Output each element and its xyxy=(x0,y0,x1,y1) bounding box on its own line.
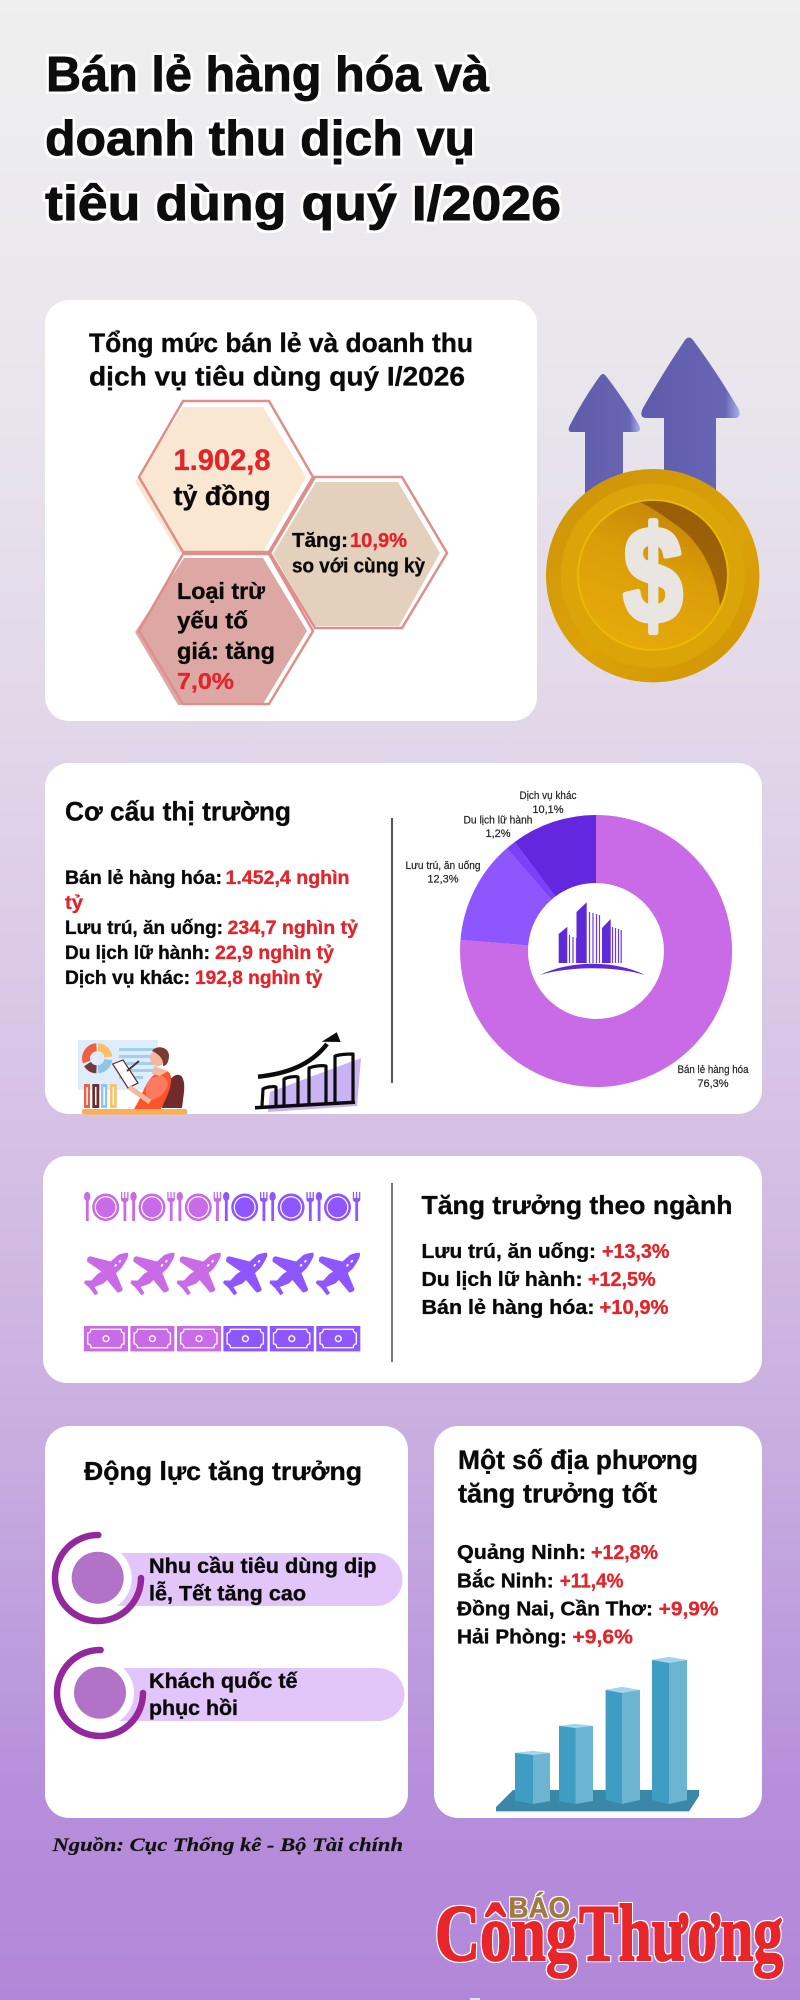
sector growth list: +12,5% xyxy=(588,1269,656,1291)
driver: holiday demand: lễ, Tết tăng cao xyxy=(149,1582,306,1606)
icon row: plates xyxy=(84,1192,360,1221)
panel: growth by sector xyxy=(43,1156,762,1383)
panel: market structure xyxy=(45,763,762,1114)
donut labels: Lưu trú, ăn uống xyxy=(406,860,480,872)
hexagon: excluding price factor: giá: tăng xyxy=(177,638,275,664)
locality growth list: +11,4% xyxy=(560,1570,624,1592)
locality growth list: +9,6% xyxy=(572,1626,633,1648)
donut labels: Du lịch lữ hành xyxy=(464,815,532,827)
hexagon: growth rate: 10,9% xyxy=(350,530,407,552)
panel: leading localities xyxy=(434,1426,762,1818)
market value list: Bán lẻ hàng hóa: xyxy=(65,868,222,889)
donut labels: 1,2% xyxy=(485,828,511,840)
hexagon: growth rate: Tăng: xyxy=(292,530,348,552)
donut labels: 76,3% xyxy=(697,1078,729,1090)
heading xyxy=(458,1445,698,1508)
source note: Nguồn: Cục Thống kê - Bộ Tài chính xyxy=(51,1835,403,1856)
icon: rising arrows and gold coin: $ xyxy=(624,499,682,651)
hexagon: total value: 1.902,8 xyxy=(174,444,270,477)
panel heading: Tổng mức bán lẻ và doanh thu xyxy=(89,328,473,358)
driver: holiday demand: Nhu cầu tiêu dùng dịp xyxy=(149,1555,376,1578)
heading: Tăng trưởng theo ngành xyxy=(422,1190,732,1220)
market value list xyxy=(65,868,358,989)
sector growth list xyxy=(422,1241,670,1319)
heading: Cơ cấu thị trường xyxy=(65,796,291,826)
sector growth list: +10,9% xyxy=(600,1297,669,1319)
panel: growth drivers xyxy=(45,1426,408,1818)
icon: city buildings xyxy=(540,902,645,975)
sector growth list: Bán lẻ hàng hóa: xyxy=(422,1297,594,1319)
sector growth list: Du lịch lữ hành: xyxy=(422,1269,582,1291)
heading: Một số địa phương xyxy=(458,1445,698,1475)
locality growth list: +12,8% xyxy=(591,1542,658,1564)
market value list: 234,7 nghìn tỷ xyxy=(228,918,358,939)
market value list: Dịch vụ khác: xyxy=(65,968,190,989)
title xyxy=(45,48,561,231)
donut labels: Bán lẻ hàng hóa xyxy=(678,1064,749,1076)
donut labels: 12,3% xyxy=(427,874,459,886)
locality growth list: Quảng Ninh: xyxy=(457,1542,586,1564)
market value list: Du lịch lữ hành: xyxy=(65,943,210,964)
locality growth list: Bắc Ninh: xyxy=(457,1568,554,1592)
market value list: 192,8 nghìn tỷ xyxy=(195,968,323,989)
panel: total retail revenue xyxy=(45,300,537,721)
hexagon: excluding price factor: Loại trừ xyxy=(177,578,265,604)
market value list: 22,9 nghìn tỷ xyxy=(215,943,334,964)
icon: rising bar chart xyxy=(255,1032,361,1112)
donut labels: 10,1% xyxy=(532,804,564,816)
locality growth list: Hải Phòng: xyxy=(457,1626,567,1648)
title: tiêu dùng quý I/2026 xyxy=(45,177,561,231)
driver: international visitors: Khách quốc tế xyxy=(149,1670,298,1693)
icon row: banknotes xyxy=(84,1326,360,1351)
market value list: tỷ xyxy=(65,893,83,914)
divider xyxy=(391,1183,393,1362)
panel heading: dịch vụ tiêu dùng quý I/2026 xyxy=(89,362,465,392)
heading: Động lực tăng trưởng xyxy=(84,1456,362,1486)
hexagon: total value: tỷ đồng xyxy=(174,481,270,511)
locality growth list: +9,9% xyxy=(659,1598,719,1620)
logo: Báo Công Thương xyxy=(435,1890,783,1978)
sector growth list: Lưu trú, ăn uống: xyxy=(422,1241,596,1263)
hexagon: total value xyxy=(135,401,313,552)
hexagon: excluding price factor: yếu tố xyxy=(177,608,248,634)
logo: Báo Công Thương: Công xyxy=(435,1890,577,1978)
driver: holiday demand xyxy=(55,1535,402,1621)
donut labels xyxy=(406,790,749,1090)
hexagon: growth rate: so với cùng kỳ xyxy=(292,556,426,578)
title: doanh thu dịch vụ xyxy=(45,112,475,166)
icon: 3D bar chart xyxy=(496,1657,699,1811)
icon: analyst with chart xyxy=(78,1040,187,1114)
icon: rising arrows and gold coin xyxy=(546,338,759,682)
locality growth list: Đồng Nai, Cần Thơ: xyxy=(457,1598,653,1620)
market value list: 1.452,4 nghìn xyxy=(226,868,350,889)
market value list: Lưu trú, ăn uống: xyxy=(65,918,223,939)
divider xyxy=(391,818,393,1083)
sector growth list: +13,3% xyxy=(602,1241,670,1263)
title: Bán lẻ hàng hóa và xyxy=(46,48,490,102)
hexagon: excluding price factor xyxy=(135,554,313,705)
hexagon: excluding price factor: 7,0% xyxy=(177,668,234,694)
hexagon: growth rate xyxy=(270,477,447,628)
donut labels: Dịch vụ khác xyxy=(520,790,577,802)
icon row: planes xyxy=(84,1253,360,1295)
heading: tăng trưởng tốt xyxy=(458,1478,657,1508)
donut chart xyxy=(406,790,749,1090)
panel heading xyxy=(89,328,473,392)
locality growth list xyxy=(457,1542,719,1648)
logo: Báo Công Thương: BÁO xyxy=(508,1891,570,1925)
driver: international visitors xyxy=(57,1650,405,1736)
driver: international visitors: phục hồi xyxy=(149,1697,238,1720)
